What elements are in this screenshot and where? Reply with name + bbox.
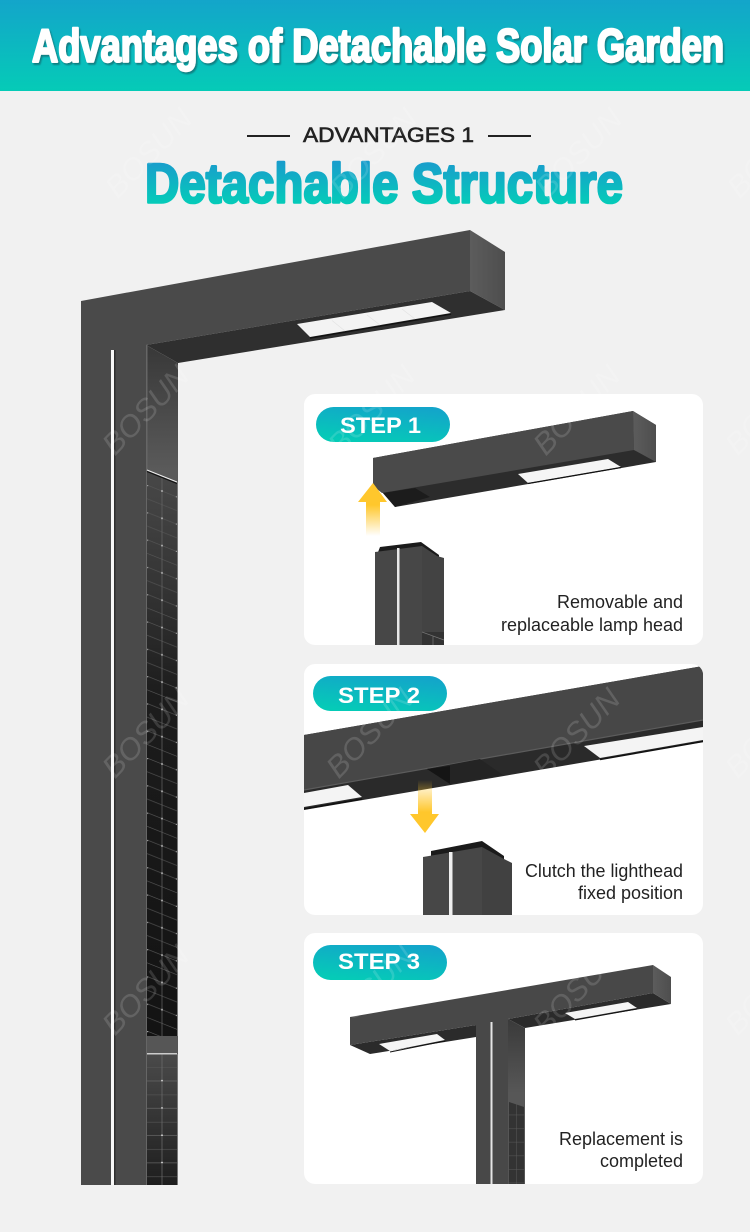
caption: replaceable lamp head [501,615,683,635]
watermarks [96,102,750,1041]
arm underside [146,291,505,363]
main lamp post illustration [81,230,505,1185]
caption: Replacement is [559,1129,683,1149]
watermarks: BOSUN [527,939,627,1041]
section label: advantages 1: ADVANTAGES 1 [303,124,474,147]
caption [501,592,683,635]
panel: step 2 [304,664,703,915]
caption [525,861,683,903]
watermarks: BOSUN [320,682,420,784]
step badge: STEP 2 [338,683,420,708]
step badge [316,407,450,442]
watermarks: BOSUN [96,682,196,784]
solar panel lower [147,1053,178,1185]
panel: step 1 [304,394,703,645]
arrow down [410,780,439,833]
watermarks: BOSUN [322,359,422,461]
watermarks: BOSUN [320,939,420,1041]
arm end face [470,230,505,310]
watermarks: BOSUN [527,359,627,461]
caption: Removable and [557,592,683,612]
post side face [146,345,178,1185]
lamp post stub [423,841,512,915]
caption [559,1129,683,1171]
caption: fixed position [578,883,683,903]
detached lamp head [373,411,656,507]
watermarks: BOSUN [96,359,196,461]
assembled lamp [350,965,671,1184]
watermarks: BOSUN [324,102,424,204]
watermarks: BOSUN [96,939,196,1041]
lamp post stub [375,542,444,645]
solar panel band [147,1036,178,1054]
panel: step 3 [304,933,703,1184]
arrow up [358,483,387,536]
caption: Clutch the lighthead [525,861,683,881]
watermarks: BOSUN [529,102,629,204]
step badge [313,676,447,711]
led strip [111,350,116,1185]
step badge: STEP 1 [340,413,421,438]
caption: completed [600,1151,683,1171]
step badge: STEP 3 [338,949,420,974]
post front face and arm [81,230,470,1185]
step badge [313,945,447,980]
watermarks: BOSUN [99,102,199,204]
section heading: Detachable Structure [145,152,623,214]
solar panel upper [147,470,178,1036]
lamp panel [297,302,451,338]
watermarks: BOSUN [527,682,627,784]
lamp head beam close-up [304,666,703,810]
header banner [0,0,750,91]
